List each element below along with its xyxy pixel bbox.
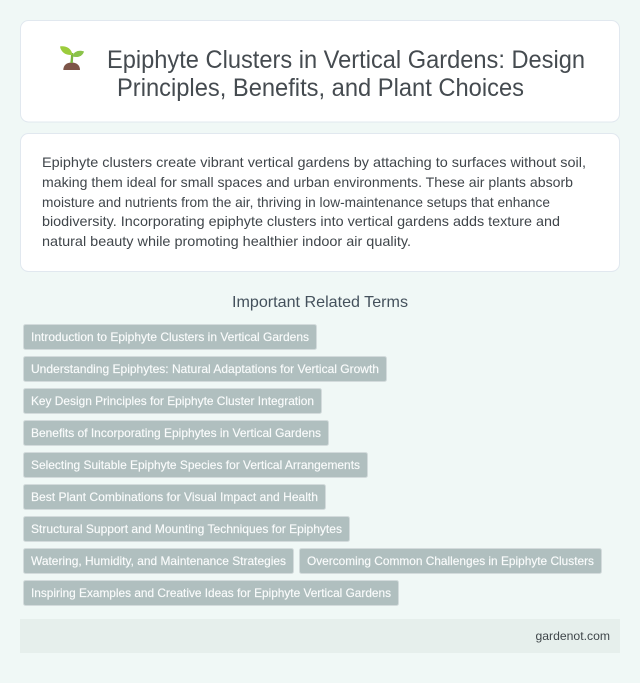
chip 5 xyxy=(24,452,368,478)
footer xyxy=(20,619,620,653)
chip 9 xyxy=(300,548,602,574)
chip 7: Structural Support and Mounting Techniques for Epiphytes xyxy=(31,522,342,536)
chip 10: Inspiring Examples and Creative Ideas for Epiphyte Vertical Gardens xyxy=(31,586,391,600)
icon: seedling xyxy=(60,46,84,70)
heading: related terms: Important Related Terms xyxy=(232,294,408,311)
text block: introduction: biodiversity. Incorporating epiphyte clusters into vertical gardens adds texture and xyxy=(42,213,560,229)
title xyxy=(107,46,585,102)
chip 8: Watering, Humidity, and Maintenance Strategies xyxy=(31,554,286,568)
text block: introduction: Epiphyte clusters create vibrant vertical gardens by attaching to surfaces without soil, xyxy=(42,154,586,170)
title: Epiphyte Clusters in Vertical Gardens: Design xyxy=(107,46,585,74)
chip 4 xyxy=(24,420,328,446)
footer source text: gardenot.com xyxy=(536,629,610,643)
title: Principles, Benefits, and Plant Choices xyxy=(117,74,524,102)
chip 10 xyxy=(24,580,398,606)
chip 3: Key Design Principles for Epiphyte Cluster Integration xyxy=(31,394,314,408)
chip 2: Understanding Epiphytes: Natural Adaptations for Vertical Growth xyxy=(31,362,379,376)
text block: introduction: natural beauty while promoting healthier indoor air quality. xyxy=(42,233,411,249)
chip 2 xyxy=(24,356,386,382)
chip 9: Overcoming Common Challenges in Epiphyte Clusters xyxy=(307,554,594,568)
text block: introduction xyxy=(42,154,586,249)
chip 3 xyxy=(24,388,322,414)
chip 6 xyxy=(24,484,326,510)
chip 6: Best Plant Combinations for Visual Impact and Health xyxy=(31,490,318,504)
text block: introduction: making them ideal for small spaces and urban environments. These air plants absorb xyxy=(42,174,573,190)
panel: title header xyxy=(20,20,620,122)
text block: introduction: moisture and nutrients from the air, thriving in low-maintenance setups that enhance xyxy=(42,194,550,210)
panel: introduction xyxy=(20,134,620,272)
related term chips xyxy=(24,324,602,606)
chip 5: Selecting Suitable Epiphyte Species for Vertical Arrangements xyxy=(31,458,360,472)
chip 4: Benefits of Incorporating Epiphytes in Vertical Gardens xyxy=(31,426,321,440)
chip 8 xyxy=(24,548,294,574)
chip 1: Introduction to Epiphyte Clusters in Vertical Gardens xyxy=(31,330,309,344)
chip 7 xyxy=(24,516,350,542)
chip 1 xyxy=(24,324,316,350)
